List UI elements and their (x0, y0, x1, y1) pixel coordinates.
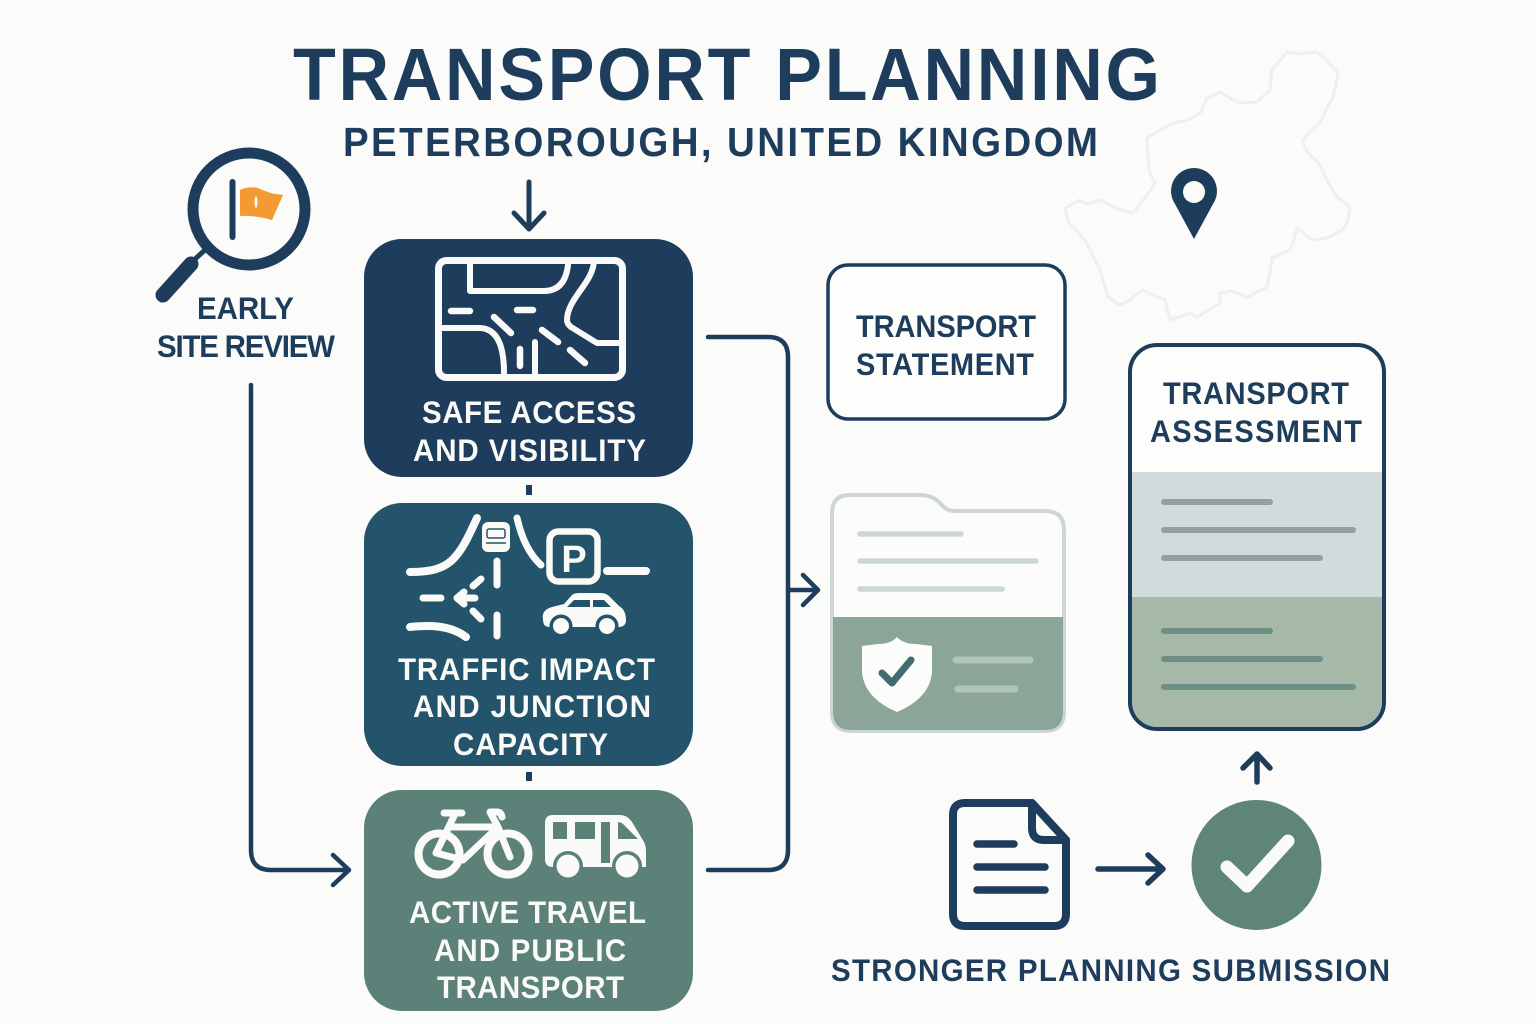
arrow: steps merge into folder (708, 337, 818, 870)
panel: active travel and public transport (364, 790, 693, 1011)
panel: safe access and visibility (364, 239, 693, 477)
label: stronger planning submission: STRONGER PLANNING SUBMISSION (831, 953, 1390, 988)
title: TRANSPORT PLANNING (293, 34, 1160, 116)
panel: traffic impact and junction capacity: TRAFFIC IMPACT (398, 652, 655, 687)
panel: transport statement: TRANSPORT (856, 310, 1037, 344)
map outline (1065, 52, 1350, 320)
panel: transport assessment: TRANSPORT (1163, 377, 1350, 411)
panel: traffic impact and junction capacity (364, 503, 693, 766)
label: early site review: EARLY (197, 291, 294, 326)
icon: junction, bus, parking and car (410, 518, 646, 638)
arrow: early site review to active travel (251, 385, 349, 885)
panel: transport statement: STATEMENT (856, 348, 1035, 382)
panel: safe access and visibility: SAFE ACCESS (422, 395, 636, 430)
arrow: title to first step (514, 182, 544, 229)
panel: traffic impact and junction capacity: AND JUNCTION (413, 689, 651, 724)
icon: bicycle (418, 812, 528, 874)
icon: check circle (1192, 800, 1322, 930)
panel: transport assessment (1130, 345, 1384, 729)
panel: active travel and public transport: TRANSPORT (437, 970, 624, 1005)
icon: location pin (1171, 168, 1217, 239)
icon: minibus (545, 815, 646, 881)
panel: safe access and visibility: AND VISIBILITY (413, 433, 646, 468)
panel: traffic impact and junction capacity: CAPACITY (453, 727, 608, 762)
panel: active travel and public transport: ACTIVE TRAVEL (409, 895, 646, 930)
arrow: document to check (1098, 855, 1163, 883)
icon: magnifier with flag (163, 153, 305, 295)
arrow: check up to assessment (1243, 754, 1270, 782)
label: early site review (157, 291, 335, 364)
panel: transport assessment: ASSESSMENT (1150, 415, 1363, 449)
panel: transport statement (828, 265, 1065, 419)
subtitle: PETERBOROUGH, UNITED KINGDOM (343, 120, 1098, 165)
panel: active travel and public transport: AND PUBLIC (434, 933, 626, 968)
icon: shield with check (862, 637, 932, 712)
icon: road map (438, 260, 622, 378)
label: early site review: SITE REVIEW (157, 329, 335, 364)
icon: junction, bus, parking and car: P (561, 539, 587, 581)
icon: document (953, 803, 1066, 926)
panel: folder with shield (832, 495, 1064, 731)
